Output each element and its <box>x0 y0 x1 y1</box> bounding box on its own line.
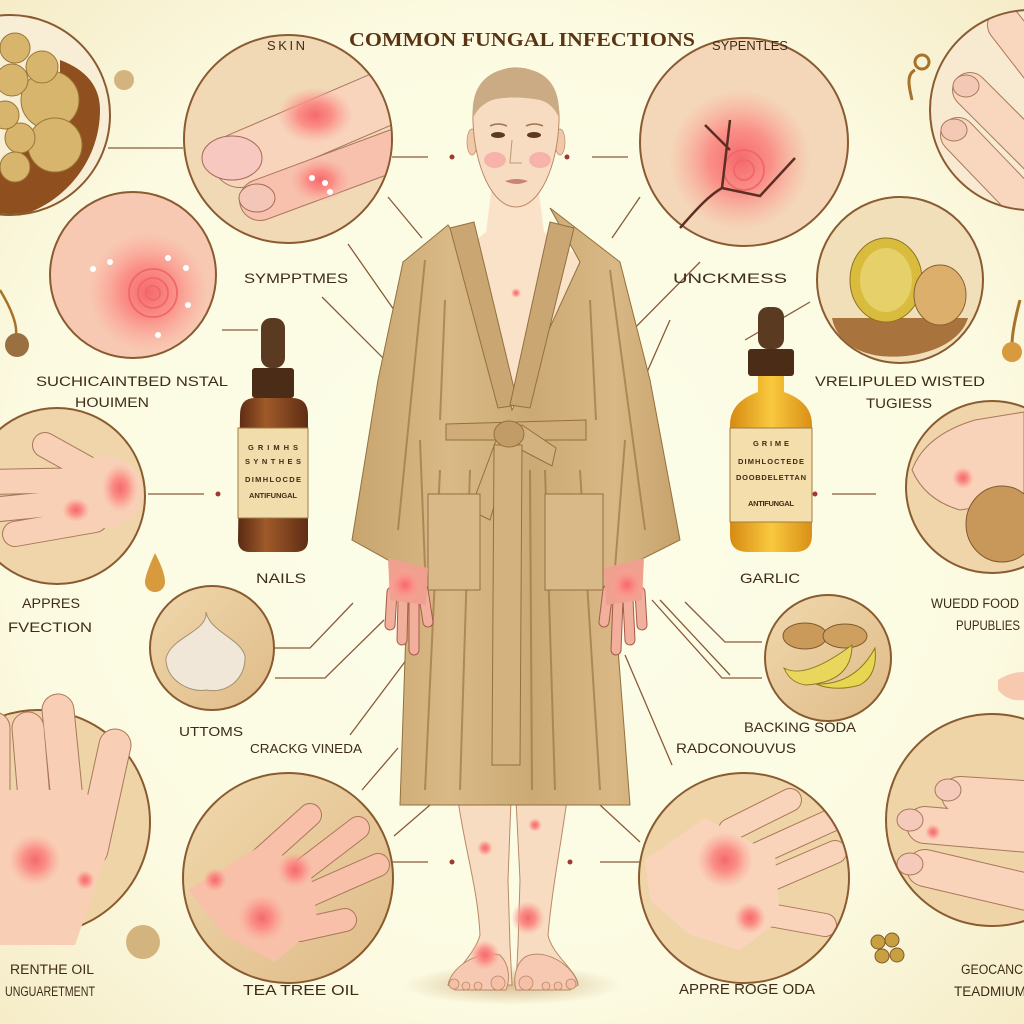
bottle: amber dropper <box>730 307 812 552</box>
connector lines <box>108 148 876 862</box>
bottle label: GRIME <box>753 439 789 448</box>
text: apple infection: APPRES <box>22 596 80 611</box>
icon: dropper left <box>0 290 29 357</box>
text: left treatment: SUCHICAINTBED NSTAL <box>36 374 229 389</box>
bottle label: DIMHLOCTEDE <box>738 457 804 466</box>
text: bottom left treatment: RENTHE OIL <box>10 962 95 977</box>
label: uncleanness: UNCKMESS <box>673 270 787 286</box>
figure: person in bathrobe <box>352 68 680 1005</box>
label: baking soda: BACKING SODA <box>744 719 857 735</box>
icon: spice top left <box>114 70 134 90</box>
text: right treatment: VRELIPULED WISTED <box>815 374 985 389</box>
bottle: brown dropper <box>238 318 308 552</box>
text: left treatment <box>36 374 229 410</box>
text: right treatment <box>815 374 985 411</box>
text: herbal foods: WUEDD FOOD <box>931 596 1019 611</box>
pockets <box>428 494 603 590</box>
icon: dropper right <box>1002 300 1022 362</box>
circle: hands with ginger root <box>906 401 1024 573</box>
label: uttoms: UTTOMS <box>179 724 243 739</box>
legs and feet <box>448 800 578 990</box>
circle: hand rash center left <box>183 773 393 983</box>
label: symptoms top: SYPENTLES <box>712 38 788 53</box>
label: garlic: GARLIC <box>740 570 800 586</box>
icon: droplet left <box>145 553 165 592</box>
robe body <box>352 208 680 805</box>
label: apple rose soda: APPRE ROGE ODA <box>679 981 815 998</box>
circle: citrus and ginger <box>817 197 983 363</box>
ground shadow <box>402 965 622 1005</box>
circle: lemons and nuts <box>765 595 891 721</box>
circle: garlic <box>150 586 274 710</box>
text: bottom left treatment <box>5 962 95 999</box>
text: apple infection: FVECTION <box>8 620 92 635</box>
bottle label: DOOBDELETTAN <box>736 473 806 482</box>
circle: cracked rash <box>640 38 848 246</box>
text: apple infection <box>8 596 92 635</box>
text: right treatment: TUGIESS <box>866 396 932 411</box>
icon: finger fragment top right of bottom circle <box>998 672 1024 700</box>
bottle label <box>238 428 308 518</box>
label: tea tree oil: TEA TREE OIL <box>243 982 359 999</box>
belt <box>446 420 586 765</box>
text: left treatment: HOUIMEN <box>75 395 149 410</box>
text: bottom left treatment: UNGUARETMENT <box>5 984 95 999</box>
neck and chest <box>452 185 584 400</box>
icon: herb cluster <box>871 933 904 963</box>
label: radconouvus: RADCONOUVUS <box>676 741 796 756</box>
bottle label <box>730 428 812 522</box>
text: bottom right treatment: TEADMIUM <box>954 984 1024 999</box>
label: cracking vinegar: CRACKG VINEDA <box>250 741 362 756</box>
bottle label: ANTIFUNGAL <box>249 491 297 500</box>
label: skin: SKIN <box>267 38 305 53</box>
label: nails: NAILS <box>256 570 306 586</box>
title: COMMON FUNGAL INFECTIONS <box>349 29 695 51</box>
icon: spice cluster <box>126 925 160 959</box>
circle: potatoes bowl <box>0 15 110 220</box>
bottle label: SYNTHES <box>245 457 301 466</box>
icon: dropper right top <box>909 55 929 100</box>
bottle label: DIMHLOCDE <box>245 475 301 484</box>
robe folds <box>398 260 645 790</box>
circle: large hand bottom left <box>0 710 150 945</box>
circle: hand rash left <box>0 408 145 584</box>
bottle label: GRIMHS <box>248 443 298 452</box>
robe collar <box>450 222 574 408</box>
circle: fingers bottom right <box>886 714 1024 926</box>
circle: ringworm <box>50 192 216 358</box>
connector dots <box>216 154 818 864</box>
head <box>467 68 565 207</box>
hands <box>387 558 645 650</box>
text: herbal foods <box>931 596 1020 633</box>
label: symptoms left: SYMPPTMES <box>244 270 348 286</box>
text: bottom right treatment <box>954 962 1024 999</box>
circle: skin finger <box>184 35 395 243</box>
circle: hand rash center right <box>639 773 849 983</box>
bottle label: ANTIFUNGAL <box>748 499 794 508</box>
circle: top right fingers <box>930 10 1024 210</box>
